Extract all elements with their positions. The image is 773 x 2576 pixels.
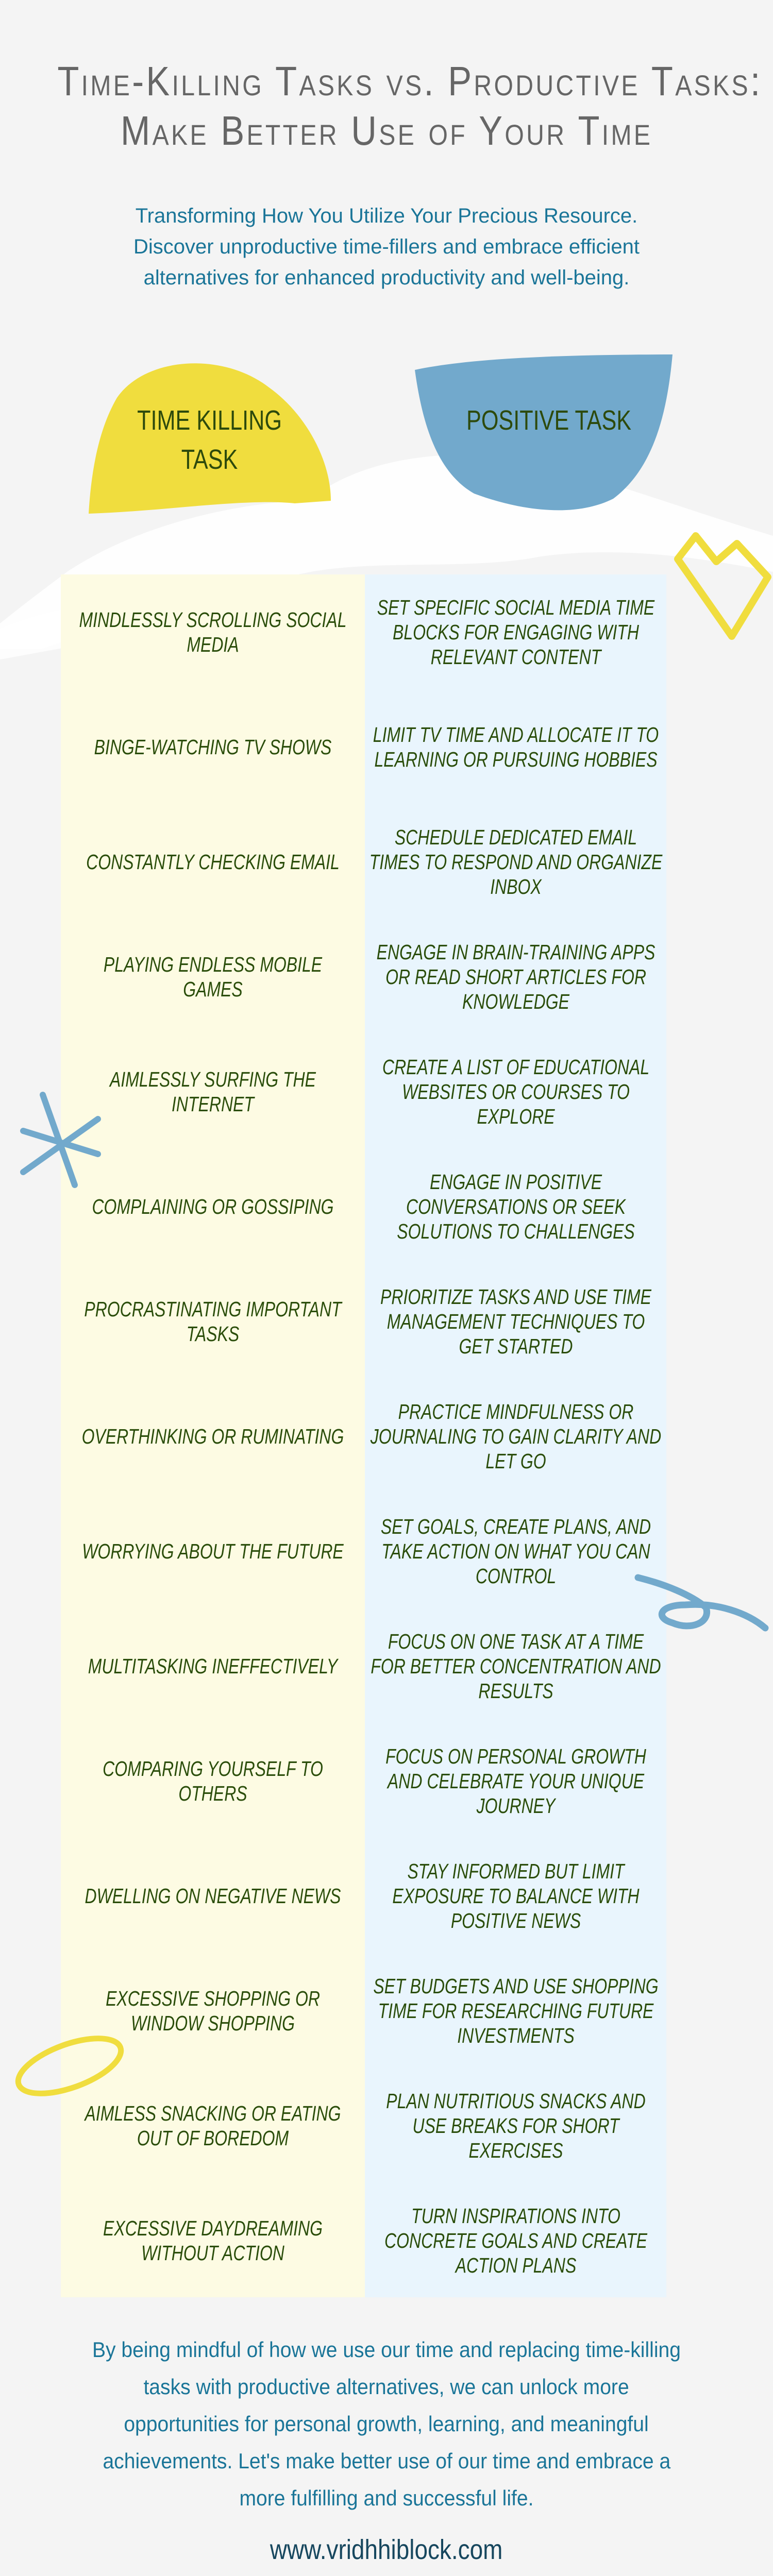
row 2: LEARNING OR PURSUING HOBBIES [374,747,657,771]
row 12: POSITIVE NEWS [450,1908,581,1932]
row 2: BINGE-WATCHING TV SHOWS [94,735,331,758]
comparison table [61,574,666,2297]
row 4: PLAYING ENDLESS MOBILE [104,952,322,976]
website url: www.vridhhiblock.com [270,2534,503,2565]
row 13: WINDOW SHOPPING [131,2011,295,2035]
conclusion paragraph: more fulfilling and successful life. [240,2486,533,2510]
row 9: WORRYING ABOUT THE FUTURE [82,1539,344,1563]
row 8: JOURNALING TO GAIN CLARITY AND [370,1424,661,1448]
row 11: COMPARING YOURSELF TO [103,1757,323,1781]
header: time killing task [89,363,331,514]
row 10: MULTITASKING INEFFECTIVELY [88,1654,338,1677]
row 2 [94,722,659,771]
title: Time-Killing Tasks vs. Productive Tasks: [57,58,762,104]
row 9 [82,1515,651,1588]
row 13: EXCESSIVE SHOPPING OR [106,1987,320,2010]
row 1: RELEVANT CONTENT [430,645,601,669]
icon: yellow oval [15,2036,124,2096]
row 2: LIMIT TV TIME AND ALLOCATE IT TO [373,722,659,746]
row 10: FOCUS ON ONE TASK AT A TIME [388,1629,644,1653]
row 12: EXPOSURE TO BALANCE WITH [392,1884,639,1907]
row 7: MANAGEMENT TECHNIQUES TO [386,1310,645,1333]
row 3: TIMES TO RESPOND AND ORGANIZE [369,850,662,874]
row 6: ENGAGE IN POSITIVE [429,1170,602,1193]
row 14: PLAN NUTRITIOUS SNACKS AND [386,2089,645,2112]
row 13: INVESTMENTS [457,2024,574,2047]
row 8: LET GO [485,1449,546,1472]
header: positive task: POSITIVE TASK [466,405,631,436]
row 14: EXERCISES [468,2138,563,2162]
conclusion paragraph: achievements. Let's make better use of our time and embrace a [103,2449,670,2473]
row 14 [84,2089,645,2162]
row 4 [104,940,655,1013]
row 1: BLOCKS FOR ENGAGING WITH [393,620,638,644]
header: positive task [415,354,673,510]
row 13: TIME FOR RESEARCHING FUTURE [378,1999,653,2023]
subtitle: Transforming How You Utilize Your Precious Resource. [136,205,637,227]
conclusion paragraph: tasks with productive alternatives, we can unlock more [144,2375,629,2399]
row 7: GET STARTED [459,1334,573,1358]
icon: blue star scribble [20,1092,101,1188]
row 9: SET GOALS, CREATE PLANS, AND [380,1515,651,1538]
header: time killing task: TASK [181,444,238,475]
background brush strokes [0,455,773,659]
row 10: FOR BETTER CONCENTRATION AND [371,1654,661,1677]
row 14: AIMLESS SNACKING OR EATING [85,2101,341,2125]
title: Make Better Use of Your Time [121,108,652,154]
row 15: ACTION PLANS [455,2253,576,2277]
row 5: INTERNET [172,1092,254,1116]
row 4: OR READ SHORT ARTICLES FOR [385,964,646,988]
row 3: CONSTANTLY CHECKING EMAIL [86,850,340,874]
row 3: INBOX [490,875,541,899]
row 12 [85,1859,640,1932]
subtitle: Discover unproductive time-fillers and embrace efficient [133,235,640,258]
row 13 [106,1974,658,2047]
row 5: WEBSITES OR COURSES TO [402,1080,629,1104]
row 3 [86,825,663,899]
row 8 [82,1399,661,1472]
row 10: RESULTS [478,1679,553,1702]
row 1: MINDLESSLY SCROLLING SOCIAL [79,608,346,632]
row 4: KNOWLEDGE [462,989,569,1013]
title [57,58,762,154]
row 8: PRACTICE MINDFULNESS OR [398,1399,633,1423]
row 11: AND CELEBRATE YOUR UNIQUE [387,1769,644,1793]
row 14: USE BREAKS FOR SHORT [412,2113,619,2137]
conclusion paragraph [92,2337,681,2510]
row 15: EXCESSIVE DAYDREAMING [103,2216,323,2240]
row 15: CONCRETE GOALS AND CREATE [384,2229,647,2252]
row 15 [103,2204,647,2277]
row 11: OTHERS [178,1782,247,1805]
row 5 [109,1055,649,1128]
icon: blue squiggle [635,1574,769,1631]
row 3: SCHEDULE DEDICATED EMAIL [394,825,637,849]
row 13: SET BUDGETS AND USE SHOPPING [373,1974,658,1998]
row 5: EXPLORE [477,1105,554,1128]
row 1 [79,596,654,669]
row 5: AIMLESSLY SURFING THE [110,1067,316,1091]
row 6 [92,1170,635,1243]
row 7 [84,1285,651,1358]
row 6: COMPLAINING OR GOSSIPING [92,1194,334,1218]
row 15: TURN INSPIRATIONS INTO [411,2204,620,2228]
subtitle: alternatives for enhanced productivity and well-being. [144,266,629,289]
row 12: DWELLING ON NEGATIVE NEWS [85,1884,341,1907]
row 4: ENGAGE IN BRAIN-TRAINING APPS [376,940,655,963]
row 8: OVERTHINKING OR RUMINATING [82,1424,344,1448]
row 4: GAMES [183,977,243,1001]
row 5: CREATE A LIST OF EDUCATIONAL [382,1055,649,1079]
row 6: SOLUTIONS TO CHALLENGES [397,1219,634,1243]
row 7: PROCRASTINATING IMPORTANT [84,1297,342,1321]
row 15: WITHOUT ACTION [141,2241,284,2265]
row 7: PRIORITIZE TASKS AND USE TIME [380,1285,651,1309]
row 11 [103,1744,646,1818]
subtitle [133,205,640,289]
row 14: OUT OF BOREDOM [137,2126,289,2149]
row 12: STAY INFORMED BUT LIMIT [407,1859,624,1883]
row 9: TAKE ACTION ON WHAT YOU CAN [381,1539,650,1563]
decoration: yellow heart scribble [674,532,771,640]
row 1: SET SPECIFIC SOCIAL MEDIA TIME [377,596,654,619]
header: time killing task: TIME KILLING [138,405,282,436]
row 7: TASKS [187,1322,239,1346]
row 9: CONTROL [475,1564,556,1588]
row 6: CONVERSATIONS OR SEEK [406,1194,625,1218]
row 11: FOCUS ON PERSONAL GROWTH [385,1744,646,1768]
row 11: JOURNEY [476,1794,555,1818]
row 1: MEDIA [187,633,239,656]
conclusion paragraph: opportunities for personal growth, learning, and meaningful [124,2412,649,2436]
row 10 [88,1629,661,1702]
conclusion paragraph: By being mindful of how we use our time and replacing time-killing [92,2337,681,2362]
